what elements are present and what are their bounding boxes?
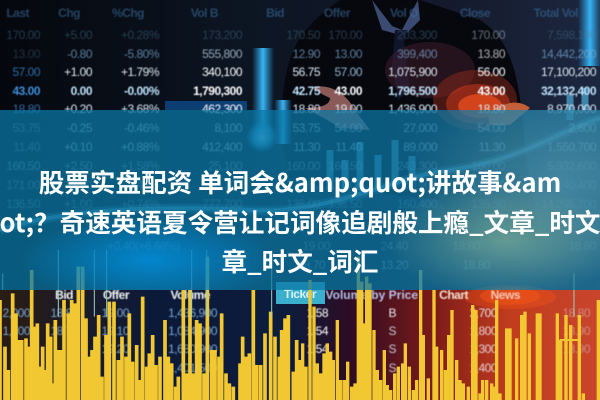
- market data table: 2,000: [2, 306, 31, 320]
- market data table: 136.00: [286, 197, 321, 211]
- market data table: 11.30: [478, 140, 506, 154]
- market data table: -0.80: [67, 47, 93, 61]
- market data table: 54.00: [334, 121, 363, 135]
- market data table: 18.90: [562, 324, 591, 338]
- market data table: 43.00: [12, 84, 41, 98]
- market data table: 1,436,900: [388, 102, 438, 116]
- market data table: 98,300: [208, 178, 243, 192]
- market data table: +0.40(+6.68%): [107, 239, 181, 253]
- market data table: 171.00: [6, 178, 41, 192]
- market data table: 170.00: [471, 28, 506, 42]
- market data table: 17,100,200: [541, 65, 597, 79]
- market data table: 18.80: [462, 258, 491, 272]
- market data table: 160.50: [6, 159, 41, 173]
- market data table: 19.00: [101, 306, 130, 320]
- market data table: Offer: [103, 288, 130, 302]
- market data table: 1,401,500: [168, 361, 218, 375]
- market data table: 160.50: [328, 159, 363, 173]
- market data table: +0.88%: [121, 140, 160, 154]
- market data table: 243,300: [397, 159, 438, 173]
- market data table: 60,900: [403, 178, 438, 192]
- market data table: 135.50: [471, 197, 506, 211]
- market data table: 57.00: [334, 65, 363, 79]
- market data table: 12.90: [292, 47, 321, 61]
- market data table: 18.70: [297, 258, 326, 272]
- orange glow beneath the band: [464, 285, 556, 309]
- market data table: 18.80: [292, 102, 321, 116]
- market data table: 140,400: [556, 178, 597, 192]
- yellow volume bars, left half: [0, 250, 297, 400]
- market data table: 160.00: [471, 159, 506, 173]
- market data table: 27,000: [403, 121, 438, 135]
- market data table: -0.46%: [124, 121, 160, 135]
- market data table: Volume by Price: [326, 288, 418, 302]
- market data table: B: [388, 306, 396, 320]
- market data table: +1.46%: [121, 178, 160, 192]
- translucent blue title band: [0, 110, 600, 290]
- market data table: 1,400: [469, 361, 498, 375]
- market data table: +0.74%: [121, 197, 160, 211]
- market data table: +5.00: [64, 28, 93, 42]
- market data table: Vol B: [191, 6, 219, 20]
- market data table: 340,100: [202, 65, 243, 79]
- market data table: Chart: [439, 288, 468, 302]
- market data table: 5,932,600: [547, 159, 597, 173]
- market data table: 13.00: [334, 47, 363, 61]
- market data table: 43.00: [477, 84, 506, 98]
- market data table: 1,700: [2, 324, 31, 338]
- market data table: 42.75: [292, 84, 321, 98]
- market data table: 1:58: [307, 306, 329, 320]
- market data table: 1,790,300: [193, 84, 243, 98]
- glowing blue bars and chart: [0, 0, 600, 230]
- market data table: +2.50: [64, 178, 93, 192]
- market data table: 11.40: [13, 140, 41, 154]
- market data table: 8,970,000: [547, 102, 597, 116]
- market data table: +1.58%: [121, 159, 160, 173]
- market data table: 1:54: [307, 324, 329, 338]
- market data table: 54.00: [477, 121, 506, 135]
- market data table: 1,800: [469, 324, 498, 338]
- market data table: Total Vol: [534, 6, 578, 20]
- market data table: 56.75: [292, 65, 321, 79]
- market data table: 53.75: [292, 121, 321, 135]
- market data table: 18.90: [312, 217, 341, 231]
- market data table: 89,000: [403, 140, 438, 154]
- market data table: 18.70: [50, 324, 79, 338]
- title: ot;？奇速英语夏令营让记词像追剧般上瘾_文章_时文: [0, 203, 600, 240]
- market data table: 1,436,900: [168, 306, 218, 320]
- market data table: 170.50: [286, 178, 321, 192]
- market data table: 18.80: [568, 239, 597, 253]
- market data table: 203,300: [397, 28, 438, 42]
- market data table: 2,700: [469, 306, 498, 320]
- market data table: 1,084,900: [168, 324, 218, 338]
- ticker tab: Ticker: [284, 287, 317, 301]
- market data table: %Chg: [112, 6, 144, 20]
- market data table: 11.40: [335, 140, 363, 154]
- market data table: 160,400: [397, 197, 438, 211]
- market data table: 18.80: [562, 306, 591, 320]
- market data table: +3.68%: [121, 102, 160, 116]
- market data table: 1,680,900: [168, 342, 218, 356]
- market data table: 19.00: [334, 102, 363, 116]
- market data table: 1,796,500: [388, 84, 438, 98]
- market data table: +0.20: [64, 102, 93, 116]
- businessman silhouette: [281, 0, 540, 240]
- market data table: 462,300: [202, 102, 243, 116]
- market data table: 18.90: [562, 342, 591, 356]
- market data table: 170.00: [6, 28, 41, 42]
- market data table: News: [491, 288, 521, 302]
- market data table: 18.80: [50, 306, 79, 320]
- market data table: +0.28%: [121, 28, 160, 42]
- market data table: +0.10: [64, 140, 93, 154]
- market data table: 32,132,400: [541, 84, 597, 98]
- market data table: Last: [6, 6, 29, 20]
- market data table: Vol O: [390, 6, 418, 20]
- market data table: Bid: [55, 288, 73, 302]
- market data table: 171.00: [471, 178, 506, 192]
- market data table: 13.20: [380, 258, 409, 272]
- market data table: +2.50: [64, 159, 93, 173]
- market data table: -0.00%: [124, 84, 160, 98]
- market data table: S: [388, 324, 396, 338]
- ticker tab: [276, 282, 325, 304]
- market data table: +1.00: [64, 65, 93, 79]
- market data table: 136.50: [6, 197, 41, 211]
- market data table: 25,100: [208, 159, 243, 173]
- market data table: 14,295,700: [541, 197, 597, 211]
- market data table: +1.00: [64, 197, 93, 211]
- market data table: 555,800: [202, 47, 243, 61]
- market data table: 11.30: [293, 140, 321, 154]
- market data table: 8,100: [214, 121, 243, 135]
- market data table: 0.00: [71, 84, 93, 98]
- market data table: Bid: [266, 6, 284, 20]
- market data table: 136.50: [328, 197, 363, 211]
- title: [0, 163, 600, 279]
- market data table: 1,550,700: [547, 140, 597, 154]
- title: 章_时文_词汇: [222, 242, 378, 279]
- market data table: 1,075,900: [388, 65, 438, 79]
- market data table: 13.80: [477, 47, 506, 61]
- market data table: Close: [460, 6, 491, 20]
- market data table: 19.20: [101, 342, 130, 356]
- market data table: 53.75: [12, 121, 41, 135]
- market data table: -5.80%: [124, 47, 160, 61]
- yellow volume bars, right half: [300, 257, 598, 400]
- market data table: Offer: [324, 6, 351, 20]
- market data table: 171.00: [328, 178, 363, 192]
- market data table: 173,200: [202, 28, 243, 42]
- market data table: 18.80: [452, 239, 481, 253]
- market data table: Chg: [58, 6, 80, 20]
- market data table: 2,600: [568, 121, 597, 135]
- market data table: 18.80: [477, 102, 506, 116]
- market data table: 412,400: [202, 140, 243, 154]
- market data table: -0.25: [67, 121, 93, 135]
- market data table: 24.40: [380, 239, 409, 253]
- market data table: 7,598,100: [547, 28, 597, 42]
- market data table: 56.00: [477, 65, 506, 79]
- market data table: S: [388, 361, 396, 375]
- market data table: 1,300: [469, 342, 498, 356]
- title: 股票实盘配资 单词会&amp;quot;讲故事&am: [39, 163, 561, 200]
- market data table: 19.10: [101, 324, 130, 338]
- market data table: 170.00: [328, 28, 363, 42]
- market data table: 399,400: [397, 47, 438, 61]
- market data table: 19.00: [302, 239, 331, 253]
- market data table: 57.00: [12, 65, 41, 79]
- market data table: 160.00: [286, 159, 321, 173]
- market data table: 13.00: [12, 47, 41, 61]
- market data table: 170.50: [286, 28, 321, 42]
- market data table: 43.00: [334, 84, 363, 98]
- market data table: 777,700: [202, 197, 243, 211]
- market data table: 14,442,200: [541, 47, 597, 61]
- market data table: 1:54: [307, 342, 329, 356]
- market data table: 18.80: [12, 102, 41, 116]
- market data table: S: [388, 342, 396, 356]
- market data table: Volume: [171, 288, 211, 302]
- market data table: +1.79%: [121, 65, 160, 79]
